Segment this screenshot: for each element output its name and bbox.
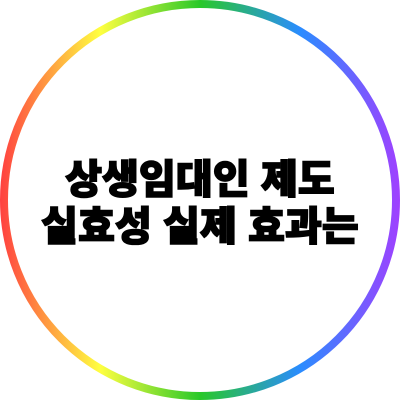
title: 실효성 실제 효과는 bbox=[41, 205, 359, 249]
title: 상생임대인 제도 bbox=[65, 158, 335, 202]
title bbox=[41, 158, 359, 249]
